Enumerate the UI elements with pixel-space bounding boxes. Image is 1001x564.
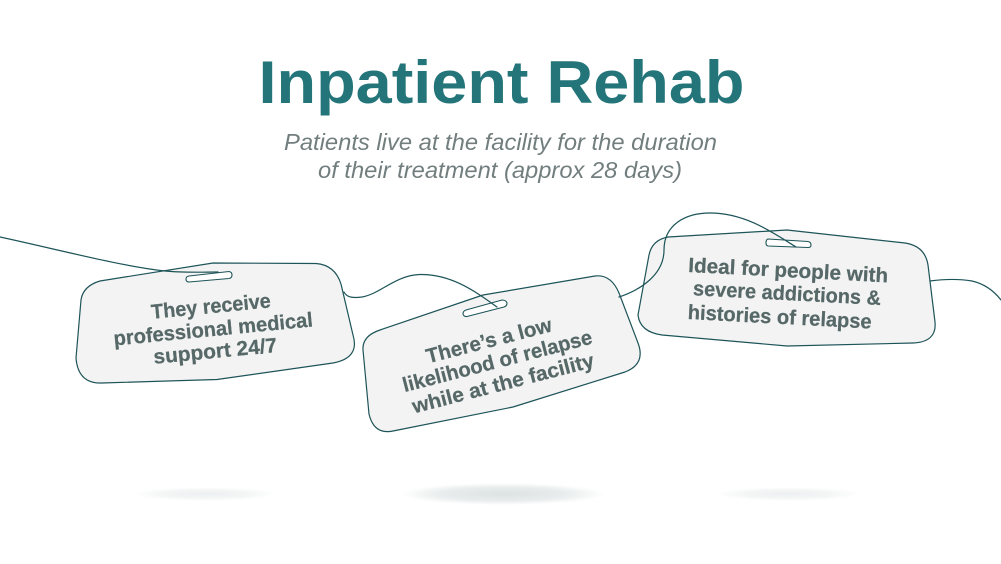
tag 1 text [110, 286, 316, 372]
tag 2 slot [463, 300, 507, 317]
tag 2 text [395, 305, 600, 419]
panel: tag 2 low relapse likelihood [363, 276, 640, 432]
tag 2 text: while at the facility [409, 349, 597, 419]
tag 3 outline [638, 230, 935, 346]
tag 3 slot [766, 239, 811, 248]
tag 1 slot [186, 272, 232, 282]
tag 3 text [685, 254, 889, 334]
tag 2 text: likelihood of relapse [400, 326, 595, 397]
tag 2 outline [363, 276, 640, 432]
tag 3 text: Ideal for people with [688, 254, 889, 287]
subtitle [284, 129, 717, 183]
panel: tag 3 ideal candidates [638, 230, 935, 346]
subtitle: of their treatment (approx 28 days) [318, 157, 682, 183]
tag 2 text: There’s a low [424, 314, 554, 368]
tag 1 text: professional medical [113, 308, 314, 351]
tag 3 text: severe addictions & [693, 277, 882, 310]
ground shadow: middle tag [401, 483, 605, 505]
panel: tag 1 professional support [76, 263, 354, 383]
ground shadow: right tag [716, 487, 860, 501]
subtitle: Patients live at the facility for the duration [284, 129, 717, 155]
ground shadow: left tag [133, 487, 277, 501]
string connecting the tags [0, 213, 1001, 307]
tag 3 text: histories of relapse [687, 301, 872, 334]
tag 1 outline [76, 263, 354, 383]
tag 1 text: They receive [150, 289, 272, 324]
title: Inpatient Rehab [258, 49, 744, 116]
tag 1 text: support 24/7 [152, 334, 278, 369]
